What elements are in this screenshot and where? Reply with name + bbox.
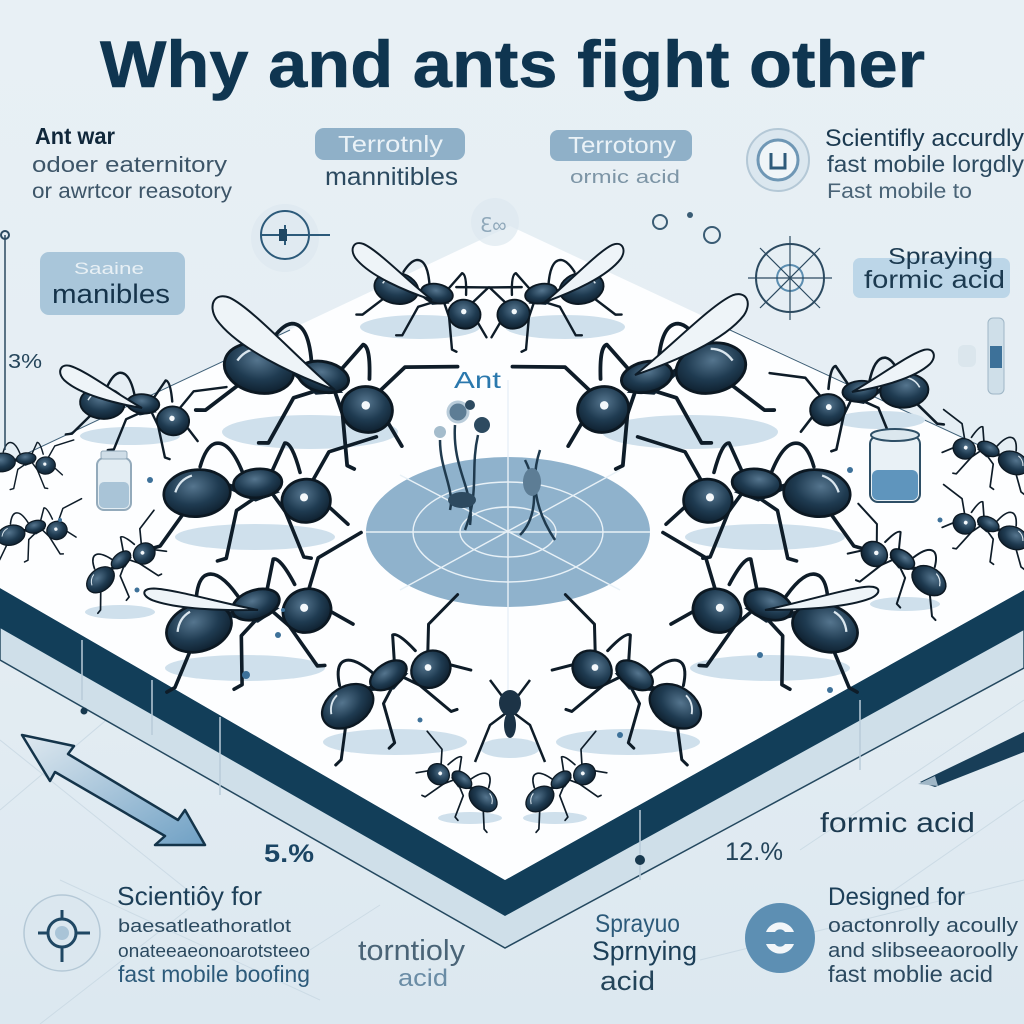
text block: ant war: Ant war	[35, 123, 115, 149]
ant: middle left	[143, 429, 386, 572]
label: mandibles: Saaine	[74, 259, 144, 278]
ant: right edge upper	[921, 406, 1024, 504]
icon: right specimen jar	[870, 429, 920, 502]
label: spraying formic acid: formic acid	[864, 266, 1005, 294]
ant: small right	[822, 500, 967, 631]
central target circle	[366, 380, 650, 690]
ant: top-down centre front	[475, 680, 545, 762]
label: territory acid: acid	[398, 965, 448, 992]
ant: lower left winged	[136, 525, 397, 714]
text block: top right: Fast mobile to	[827, 180, 972, 203]
text block: ant war	[32, 123, 233, 203]
ant ground shadows	[80, 315, 940, 824]
label: territory mandibles: Terrotnly	[338, 131, 444, 157]
text block: bottom left	[117, 881, 310, 987]
ant: middle right	[628, 429, 871, 572]
ant: far right winged	[769, 347, 945, 456]
ant: small left	[68, 508, 189, 622]
central skirmish illustration: Ant	[454, 367, 502, 393]
stat: 12 percent: 12.%	[725, 838, 783, 866]
platform: isometric white board	[0, 226, 1024, 948]
icon: top centre molecule cluster: ℇ∞	[480, 215, 507, 237]
text block: bottom right: and slibseeaoroolly	[828, 940, 1018, 962]
icon: right test tube	[958, 318, 1004, 394]
ant: large right winged	[511, 290, 779, 486]
ant: front left	[291, 589, 510, 781]
scattered debris particles	[58, 467, 942, 738]
text block: bottom left: fast mobile boofing	[118, 961, 310, 987]
label: territory acid: torntioly	[358, 935, 466, 967]
stat: left percent: 3%	[8, 351, 42, 373]
text block: top right: Scientifly accurdly	[825, 125, 1024, 152]
label: spraying acid	[592, 910, 697, 996]
ant: right edge lower	[921, 481, 1024, 579]
ant: far left winged	[56, 363, 227, 464]
label: territory formic acid: ormic acid	[570, 167, 680, 187]
text block: bottom right	[828, 883, 1018, 987]
ant: top left winged	[347, 240, 523, 362]
label: territory formic acid	[550, 130, 692, 187]
icon: left specimen jar	[97, 451, 131, 510]
text block: bottom right: oactonrolly acoully	[828, 915, 1018, 937]
label: spraying acid: acid	[600, 966, 655, 996]
label: spraying formic acid	[853, 243, 1010, 298]
ant: left edge lower	[0, 496, 94, 571]
icon: bottom right cycle badge	[745, 903, 815, 973]
left scale line	[1, 231, 9, 450]
label: formic acid: formic acid	[820, 807, 975, 838]
ant: lower right winged	[627, 525, 888, 714]
label: spraying formic acid: Spraying	[888, 243, 993, 269]
text block: ant war: odoer eaternitory	[32, 152, 227, 177]
label: mandibles: manibles	[52, 279, 170, 309]
label: territory mandibles	[315, 128, 465, 191]
text block: top right	[825, 125, 1024, 203]
ant: front right	[513, 589, 732, 781]
text block: ant war: or awrtcor reasotory	[32, 180, 233, 203]
text block: bottom left: Scientiôy for	[117, 881, 262, 911]
ant: left edge upper	[0, 437, 78, 494]
text block: bottom right: fast moblie acid	[828, 961, 993, 987]
ant: bottom left small	[394, 729, 515, 841]
text block: bottom left: onateeaeonoarotsteeo	[118, 941, 310, 961]
floor grid lines	[0, 700, 1024, 1024]
label: spraying acid: Sprayuo	[595, 910, 680, 938]
icon: bottom right pen	[918, 732, 1024, 787]
arrow: double headed	[22, 735, 205, 845]
ant: large left winged	[191, 291, 459, 486]
title: Why and ants fight other	[100, 27, 925, 101]
icon: top left target	[251, 204, 330, 272]
text block: bottom right: Designed for	[828, 883, 965, 911]
icon: top centre molecule cluster	[471, 198, 720, 246]
label: territory formic acid: Terrotony	[568, 132, 677, 158]
central skirmish illustration	[434, 367, 555, 540]
icon: crosshair wheel	[748, 236, 832, 320]
ant: bottom right small	[508, 729, 629, 841]
label: territory acid	[358, 935, 466, 992]
stat: 5 percent: 5.%	[264, 840, 314, 868]
label: territory mandibles: mannitibles	[325, 163, 458, 191]
label: spraying acid: Sprnying	[592, 936, 697, 966]
label: mandibles	[40, 252, 185, 315]
ant: top right winged	[455, 241, 630, 362]
icon: bottom left scientific target	[24, 895, 100, 971]
text block: bottom left: baesatleathoratlot	[118, 916, 291, 936]
text block: top right: fast mobile lorgdly	[827, 151, 1024, 177]
icon: top right badge	[747, 129, 809, 191]
